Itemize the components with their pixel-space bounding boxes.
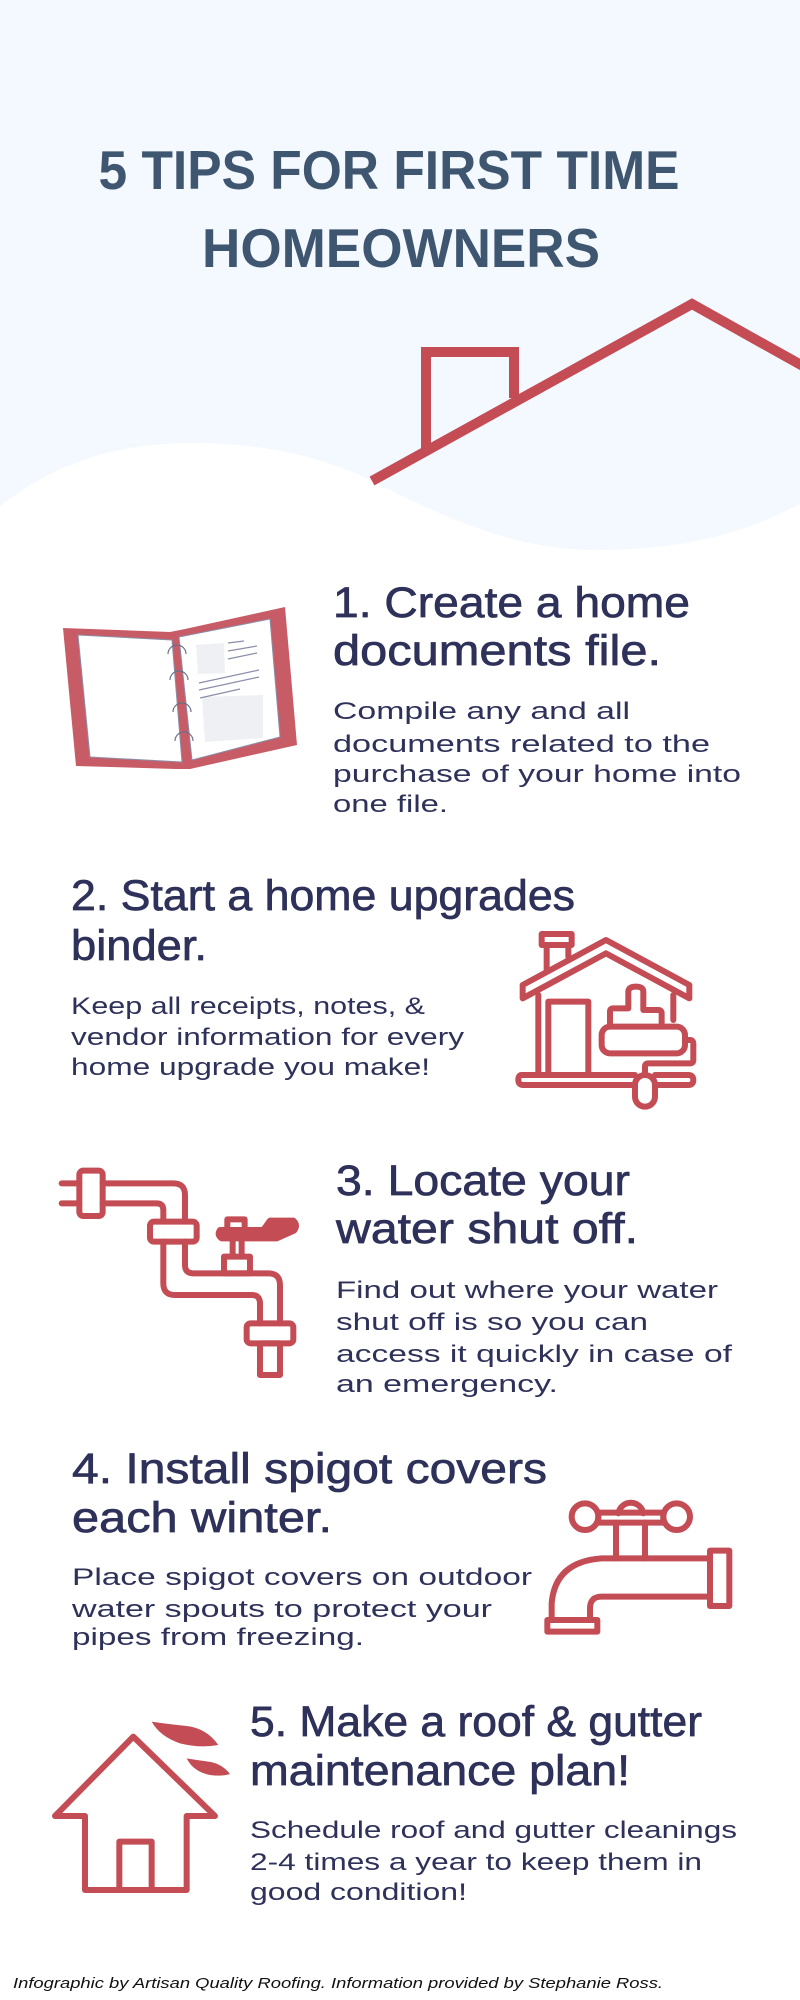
body 4	[71, 1564, 532, 1651]
body 1: Compile any and all	[333, 698, 630, 725]
title: HOMEOWNERS	[202, 217, 600, 279]
title: 5 TIPS FOR FIRST TIME	[98, 139, 680, 201]
heading 1	[333, 579, 690, 675]
heading 5: maintenance plan!	[250, 1747, 630, 1795]
body 4: pipes from freezing.	[72, 1624, 364, 1651]
heading 5	[250, 1698, 702, 1795]
heading 3: 3. Locate your	[336, 1157, 630, 1205]
heading 2	[71, 872, 575, 970]
heading 2: binder.	[71, 922, 207, 970]
footer credit: Infographic by Artisan Quality Roofing. Information provided by Stephanie Ross.	[13, 1975, 663, 1992]
icon: house with leaves	[55, 1722, 230, 1890]
body 2	[71, 993, 465, 1081]
roof with chimney	[372, 304, 800, 481]
tip 2	[71, 872, 693, 1107]
body 1	[333, 698, 741, 818]
body 3: an emergency.	[336, 1371, 558, 1398]
body 1: one file.	[333, 791, 448, 818]
body 5: Schedule roof and gutter cleanings	[250, 1817, 737, 1844]
heading 4: 4. Install spigot covers	[72, 1445, 547, 1493]
body 3: shut off is so you can	[336, 1309, 648, 1336]
tip 3	[62, 1157, 732, 1398]
body 2: vendor information for every	[71, 1024, 465, 1051]
header background	[0, 0, 800, 700]
body 4: Place spigot covers on outdoor	[72, 1564, 532, 1591]
body 5: good condition!	[250, 1879, 467, 1906]
heading 3	[335, 1157, 638, 1253]
body 5	[250, 1817, 737, 1906]
body 3: Find out where your water	[336, 1277, 718, 1304]
tip 4	[71, 1445, 729, 1651]
body 3: access it quickly in case of	[336, 1341, 732, 1368]
icon: water pipe with shut-off valve	[62, 1171, 296, 1375]
title	[98, 139, 680, 279]
body 4: water spouts to protect your	[71, 1596, 492, 1623]
heading 5: 5. Make a roof & gutter	[250, 1698, 702, 1746]
heading 4	[72, 1445, 547, 1542]
heading 2: 2. Start a home upgrades	[71, 872, 575, 920]
body 3	[336, 1277, 732, 1398]
body 5: 2-4 times a year to keep them in	[250, 1849, 702, 1876]
heading 3: water shut off.	[335, 1205, 638, 1253]
body 2: home upgrade you make!	[71, 1054, 430, 1081]
heading 1: 1. Create a home	[333, 579, 690, 627]
icon: binder	[63, 607, 297, 769]
icon: faucet	[547, 1503, 729, 1632]
body 2: Keep all receipts, notes, &	[71, 993, 425, 1020]
tip 1	[63, 579, 741, 818]
body 1: purchase of your home into	[333, 761, 741, 788]
icon: house with paint roller	[518, 934, 693, 1107]
heading 4: each winter.	[72, 1494, 332, 1542]
body 1: documents related to the	[333, 731, 710, 758]
tip 5	[55, 1698, 737, 1906]
heading 1: documents file.	[333, 627, 661, 675]
